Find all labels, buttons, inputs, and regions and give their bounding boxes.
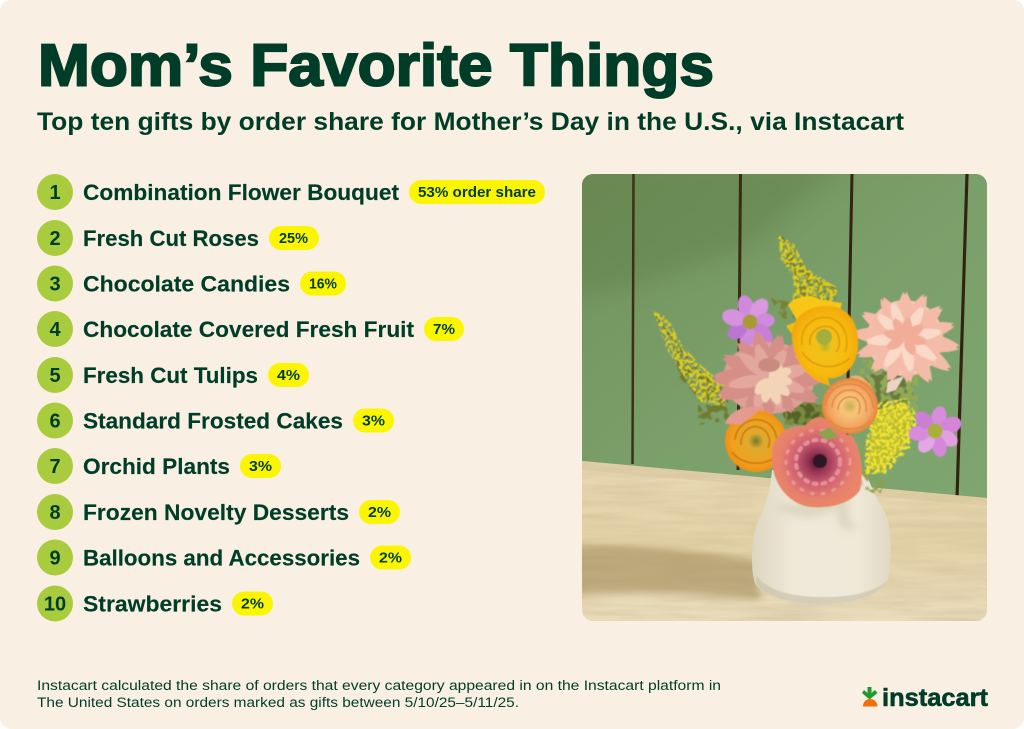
item 8	[37, 494, 400, 530]
item 1: 53% order share	[418, 185, 536, 201]
coral ranunculus	[772, 417, 862, 507]
footnote: The United States on orders marked as gifts between 5/10/25–5/11/25.	[37, 695, 519, 711]
item 7: 3%	[249, 459, 272, 475]
item 8: Frozen Novelty Desserts	[83, 500, 349, 525]
item 3	[37, 266, 346, 302]
yellow goldenrod cloud	[864, 398, 918, 474]
title: Mom’s Favorite Things	[38, 32, 714, 98]
item 4: 7%	[433, 322, 455, 338]
item 2	[37, 220, 319, 256]
item 2: Fresh Cut Roses	[83, 226, 259, 251]
item 7: 7	[49, 456, 61, 478]
peach chrysanthemum	[852, 291, 961, 393]
goldenrod sprigs	[653, 234, 838, 425]
item 5: 5	[49, 365, 61, 387]
travertine table	[560, 461, 987, 621]
item 9: 2%	[379, 550, 402, 566]
item 3: 3	[49, 274, 61, 296]
item 2: 25%	[279, 231, 308, 247]
subtitle: Top ten gifts by order share for Mother’s Day in the U.S., via Instacart	[37, 108, 905, 136]
item 3: Chocolate Candies	[83, 272, 290, 296]
footnote: Instacart calculated the share of orders that every category appeared in on the Instacart platform in	[37, 678, 721, 694]
item 10: 2%	[241, 596, 264, 612]
item 9: 9	[49, 548, 61, 570]
item 10: 10	[44, 594, 66, 616]
item 10	[37, 586, 273, 622]
golden ranunculus	[725, 407, 787, 472]
item 6: 3%	[362, 414, 385, 430]
item 4: Chocolate Covered Fresh Fruit	[83, 317, 415, 342]
item 6: Standard Frosted Cakes	[83, 408, 343, 434]
vase	[752, 470, 891, 605]
footnote	[37, 678, 721, 711]
item 8: 8	[49, 502, 61, 524]
pink cosmos	[908, 405, 964, 458]
orange ranunculus	[822, 375, 878, 434]
item 1	[37, 174, 545, 210]
item 6	[37, 402, 394, 438]
item 9: Balloons and Accessories	[83, 546, 360, 570]
icon: carrot	[862, 687, 878, 706]
item 7	[37, 448, 281, 484]
instacart logo	[862, 684, 989, 712]
green panelled wall	[582, 174, 987, 498]
item 2: 2	[49, 228, 61, 250]
purple cosmos	[722, 294, 776, 346]
item 9	[37, 540, 411, 576]
item 1: 1	[49, 182, 61, 204]
item 5	[37, 357, 309, 393]
item 6: 6	[49, 410, 61, 432]
item 5: 4%	[277, 368, 300, 384]
bouquet	[653, 234, 964, 507]
item 4: 4	[49, 319, 61, 341]
item 10: Strawberries	[83, 592, 222, 616]
item 4	[37, 311, 464, 347]
item 5: Fresh Cut Tulips	[83, 363, 258, 388]
photo: flower bouquet in a white vase	[560, 160, 987, 621]
green berries	[783, 360, 918, 496]
item 1: Combination Flower Bouquet	[83, 180, 400, 205]
item 3: 16%	[309, 276, 337, 292]
wordmark: instacart	[882, 684, 989, 712]
ranked list	[37, 174, 545, 622]
pink chrysanthemum	[712, 330, 826, 417]
yellow ranunculus	[786, 296, 858, 386]
item 7: Orchid Plants	[83, 454, 230, 479]
item 8: 2%	[368, 505, 391, 521]
